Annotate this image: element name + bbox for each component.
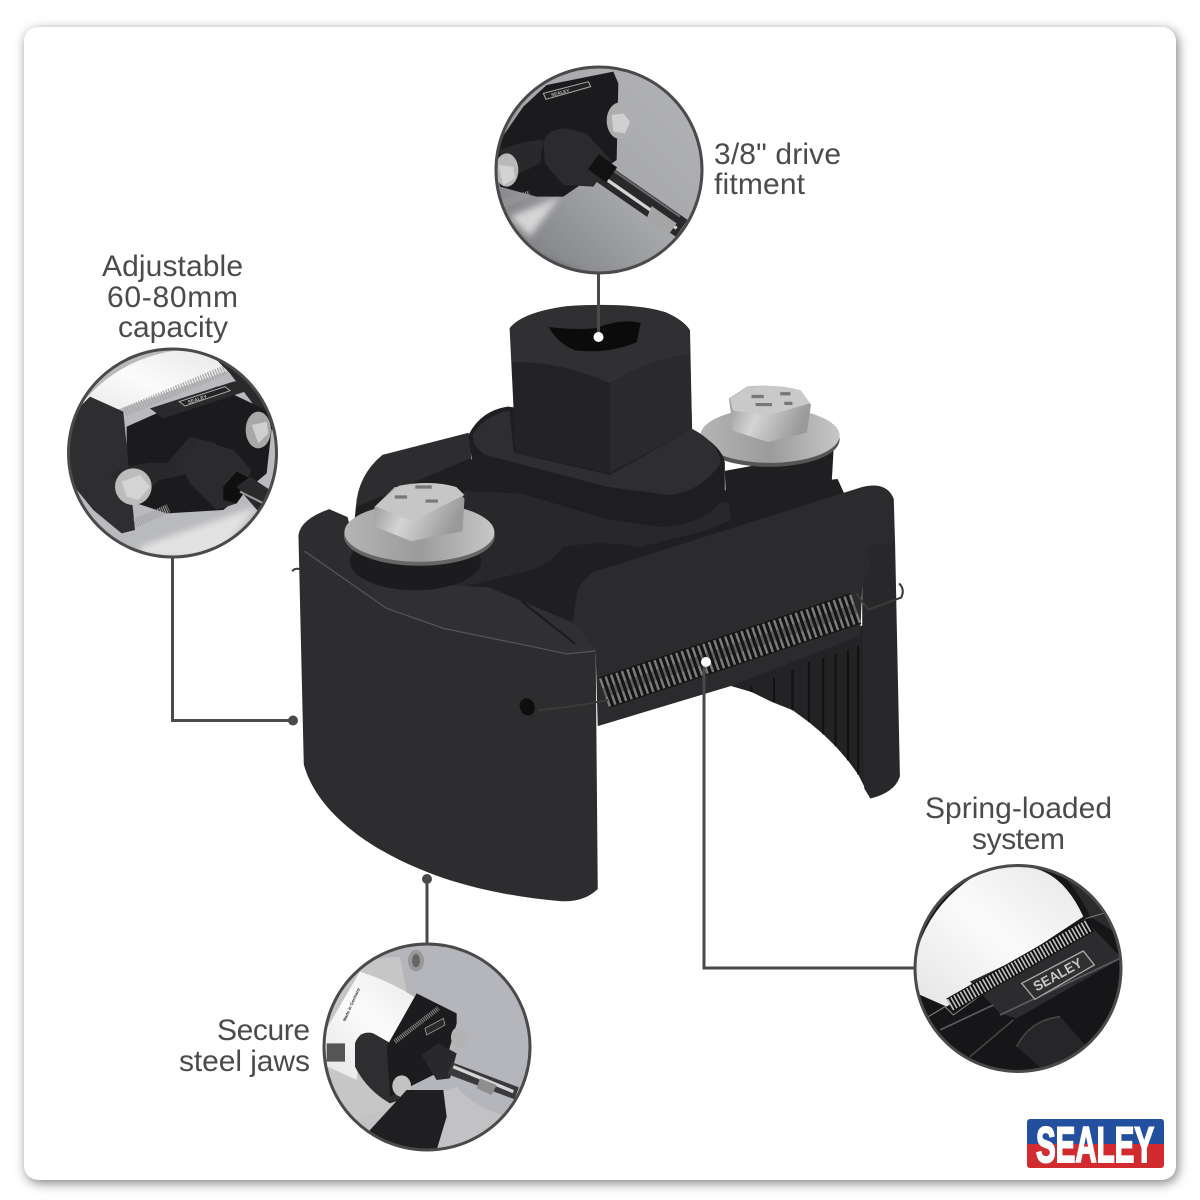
label: adjustable capacity (102, 250, 243, 344)
detail circle: secure steel jaws (322, 942, 532, 1152)
main product: oil filter wrench (292, 305, 903, 901)
dark inner backing (350, 459, 854, 652)
ribbed inner jaw (731, 624, 866, 790)
label: adjustable capacity: capacity (118, 311, 228, 344)
detail circle: spring system (914, 864, 1122, 1073)
label: secure steel jaws: Secure (217, 1014, 310, 1047)
tension spring (604, 608, 856, 693)
label: spring-loaded system: Spring-loaded (925, 792, 1112, 825)
right jaw side strip (862, 539, 900, 799)
callout lines (172, 272, 915, 968)
square drive head (510, 305, 692, 473)
jaw hole (517, 696, 537, 718)
detail circle: drive fitment (494, 66, 704, 274)
detail circle: secure steel jaws: Made in Germany (342, 987, 361, 1022)
label: 3/8 inch drive fitment: 3/8" drive (714, 138, 841, 171)
front jaw top (350, 577, 597, 656)
label: spring-loaded system (925, 792, 1112, 856)
label: adjustable capacity: Adjustable (102, 250, 243, 283)
detail circle: adjustable capacity (67, 348, 278, 558)
drive socket hole (549, 321, 641, 351)
label: 3/8 inch drive fitment (714, 138, 841, 201)
detail circle: adjustable capacity: SEALEY (187, 394, 209, 406)
front jaw face (298, 509, 598, 901)
detail circle: drive fitment: SEALEY (551, 88, 571, 98)
label: secure steel jaws: steel jaws (179, 1045, 310, 1078)
wire hooks (292, 569, 903, 710)
right bolt stack (699, 385, 840, 531)
right jaw plate (571, 485, 895, 726)
label: adjustable capacity: 60-80mm (107, 281, 238, 314)
callout dots (288, 332, 711, 884)
label: secure steel jaws (179, 1014, 310, 1078)
detail circle: spring system: SEALEY (1030, 954, 1085, 994)
label: 3/8 inch drive fitment: fitment (714, 168, 806, 201)
left bolt stack (344, 483, 495, 590)
label: spring-loaded system: system (972, 823, 1065, 856)
oval collar (469, 407, 725, 527)
link plate (352, 491, 731, 594)
rear jaw (356, 433, 473, 519)
